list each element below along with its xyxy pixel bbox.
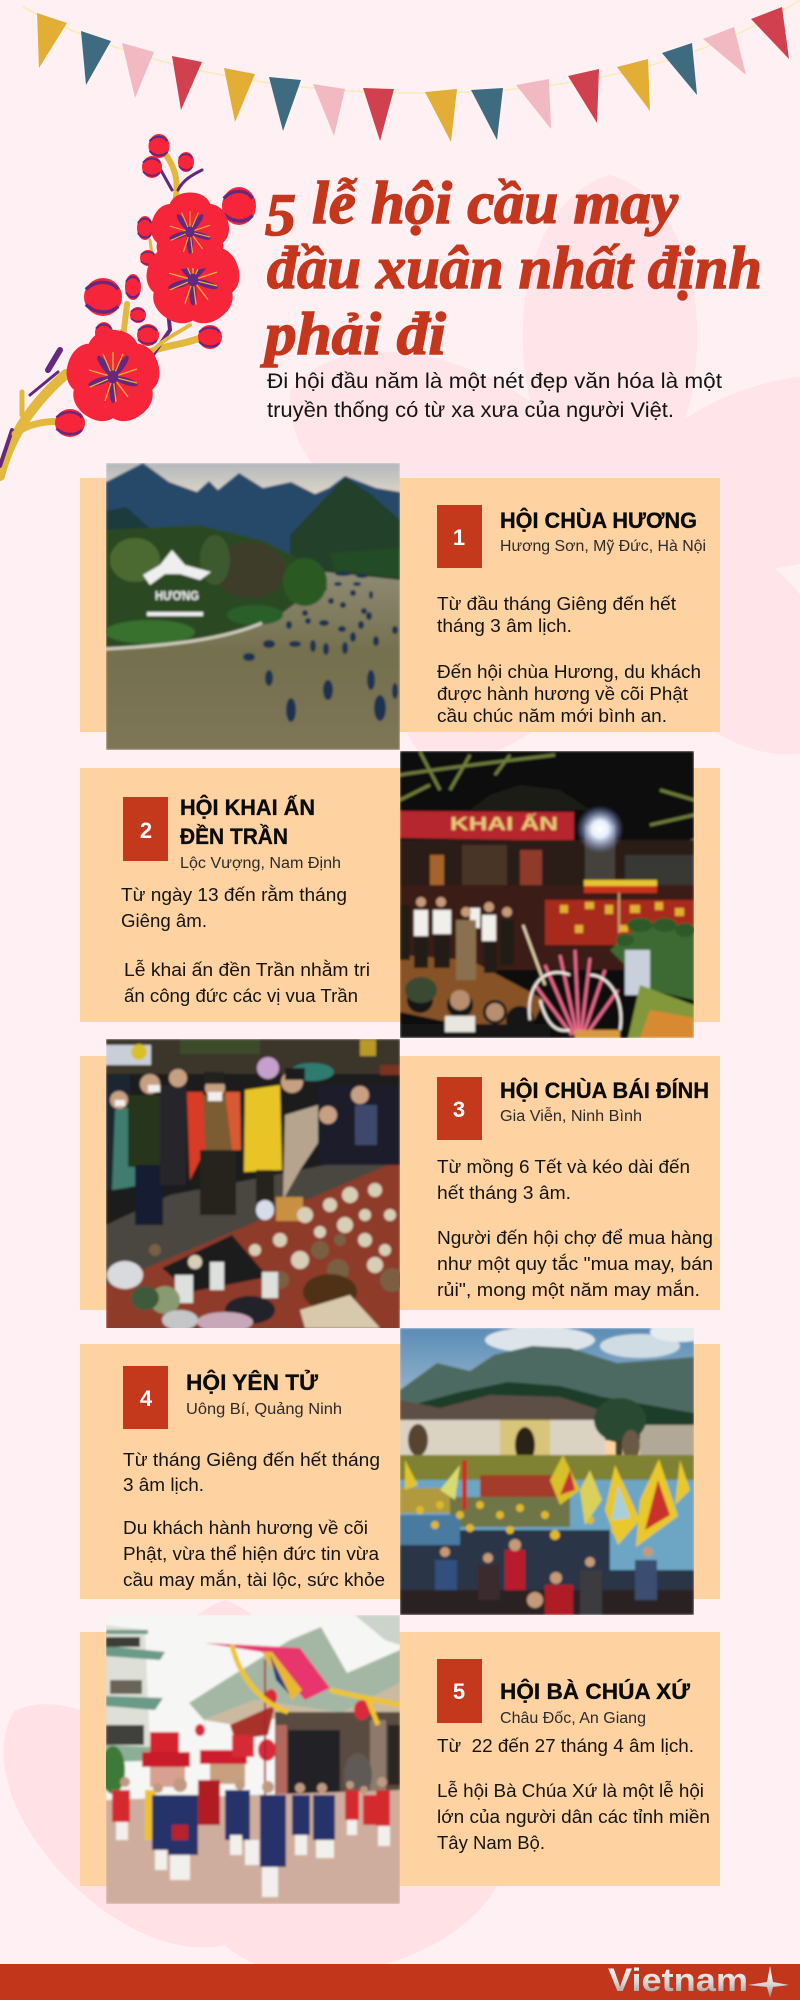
location 2: Lộc Vượng, Nam Định xyxy=(180,855,341,872)
footer bar xyxy=(0,1962,800,2000)
location 3: Gia Viễn, Ninh Bình xyxy=(500,1108,642,1125)
photo: Hương pagoda river xyxy=(105,463,400,750)
body text 2 xyxy=(121,884,370,1006)
body text 2: Lễ khai ấn đền Trần nhằm tri xyxy=(124,959,370,980)
body text 3 xyxy=(437,1157,713,1300)
body text 1: được hành hương về cõi Phật xyxy=(437,684,688,704)
body text 5 xyxy=(437,1736,710,1853)
number badge 1 xyxy=(437,505,482,568)
body text 3: hết tháng 3 âm. xyxy=(437,1183,571,1203)
panel background 3 xyxy=(80,1056,720,1310)
body text 2: Từ ngày 13 đến rằm tháng xyxy=(121,884,347,905)
number badge 4: 4 xyxy=(140,1386,153,1411)
body text 3: rủi", mong một năm may mắn. xyxy=(437,1279,700,1300)
intro text xyxy=(267,370,722,422)
body text 3: Từ mồng 6 Tết và kéo dài đến xyxy=(437,1157,690,1177)
title: lễ hội cầu may xyxy=(312,170,678,236)
photo: Yên Tử temple crowd xyxy=(400,1322,710,1615)
number badge 3 xyxy=(437,1077,482,1140)
body text 5: Tây Nam Bộ. xyxy=(437,1833,545,1853)
location 1: Hương Sơn, Mỹ Đức, Hà Nội xyxy=(500,538,706,555)
body text 2: ấn công đức các vị vua Trần xyxy=(124,986,358,1006)
body text 1: cầu chúc năm mới bình an. xyxy=(437,706,667,726)
panel background 1 xyxy=(80,478,720,732)
panel: festival 2 xyxy=(80,751,720,1038)
number badge 5: 5 xyxy=(453,1679,465,1704)
location 5: Châu Đốc, An Giang xyxy=(500,1710,646,1727)
body text 4: Phật, vừa thể hiện đức tin vừa xyxy=(123,1544,380,1564)
number badge 4 xyxy=(123,1366,168,1429)
photo: Khai Ấn ceremony: KHAI ẤN xyxy=(450,813,558,834)
title: 5 xyxy=(265,182,296,248)
body text 1: Đến hội chùa Hương, du khách xyxy=(437,662,701,682)
body text 5: lớn của người dân các tỉnh miền xyxy=(437,1807,710,1827)
photo: Bà Chúa Xứ procession xyxy=(101,1615,400,1904)
number badge 2: 2 xyxy=(140,818,152,843)
number badge 3: 3 xyxy=(453,1097,465,1122)
panel: festival 5 xyxy=(80,1615,720,1904)
body text 5: Từ 22 đến 27 tháng 4 âm lịch. xyxy=(437,1736,694,1756)
body text 1: Từ đầu tháng Giêng đến hết xyxy=(437,594,676,614)
photo: market at Bái Đính xyxy=(106,1039,404,1332)
heading 2: HỘI KHAI ẤN xyxy=(180,795,315,820)
body text 4: 3 âm lịch. xyxy=(123,1475,204,1495)
panel: festival 4 xyxy=(80,1322,720,1615)
body text 1: tháng 3 âm lịch. xyxy=(437,616,572,636)
title: đầu xuân nhất định xyxy=(267,235,762,301)
panel background 4 xyxy=(80,1344,720,1599)
background flower: top right xyxy=(257,175,800,803)
intro text: truyền thống có từ xa xưa của người Việt. xyxy=(267,399,674,422)
heading 2 xyxy=(180,795,315,849)
heading 4: HỘI YÊN TỬ xyxy=(186,1370,319,1395)
photo: Hương pagoda river: HƯƠNG xyxy=(155,588,199,603)
number badge 2 xyxy=(123,797,168,861)
icon: plum blossom branch xyxy=(0,134,256,476)
body text 3: Người đến hội chợ để mua hàng xyxy=(437,1228,713,1248)
body text 4: Từ tháng Giêng đến hết tháng xyxy=(123,1450,380,1470)
body text 3: như một quy tắc "mua may, bán xyxy=(437,1253,713,1274)
title: phải đi xyxy=(260,301,446,367)
photo: Khai Ấn ceremony xyxy=(400,751,695,1038)
panel: festival 3 xyxy=(80,1039,720,1332)
panel: festival 1 xyxy=(80,463,720,750)
background flower: bottom left xyxy=(0,1600,532,2000)
heading 3: HỘI CHÙA BÁI ĐÍNH xyxy=(500,1078,709,1103)
panel background 5 xyxy=(80,1632,720,1886)
body text 5: Lễ hội Bà Chúa Xứ là một lễ hội xyxy=(437,1780,704,1801)
body text 4: Du khách hành hương về cõi xyxy=(123,1518,368,1538)
intro text: Đi hội đầu năm là một nét đẹp văn hóa là một xyxy=(267,370,722,393)
logo: Vietnam+: Vietnam xyxy=(608,1962,748,1998)
title xyxy=(260,170,762,367)
heading 2: ĐỀN TRẦN xyxy=(180,824,288,849)
panel background 2 xyxy=(80,768,720,1022)
body text 1 xyxy=(437,594,701,726)
body text 4 xyxy=(123,1450,385,1590)
heading 1: HỘI CHÙA HƯƠNG xyxy=(500,508,697,533)
logo: Vietnam+ xyxy=(608,1962,789,1998)
location 4: Uông Bí, Quảng Ninh xyxy=(186,1401,342,1418)
number badge 1: 1 xyxy=(453,525,465,550)
heading 5: HỘI BÀ CHÚA XỨ xyxy=(500,1679,691,1704)
bunting garland xyxy=(23,0,800,142)
number badge 5 xyxy=(437,1659,482,1723)
body text 2: Giêng âm. xyxy=(121,911,207,931)
body text 4: cầu may mắn, tài lộc, sức khỏe xyxy=(123,1569,385,1590)
